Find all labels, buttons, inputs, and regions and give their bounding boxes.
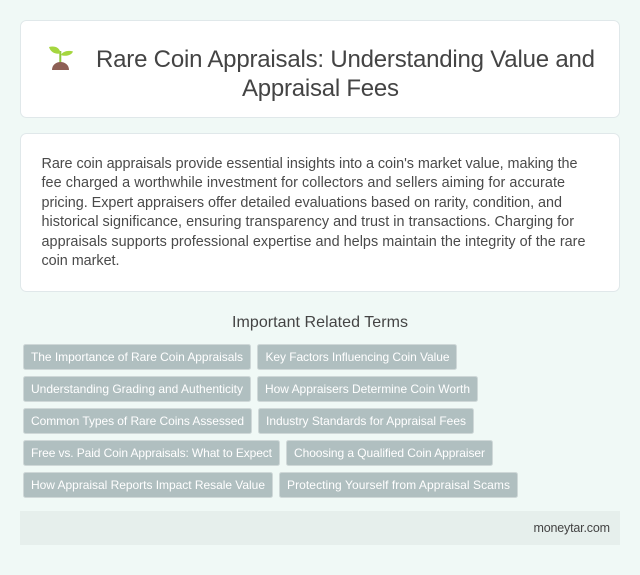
chip bbox=[258, 344, 456, 370]
footer: moneytar.com bbox=[534, 521, 610, 535]
text block: summary: Rare coin appraisals provide essential insights into a coin's market value, making the bbox=[42, 156, 578, 172]
footer bbox=[20, 511, 620, 545]
chip bbox=[24, 472, 272, 498]
chip bbox=[258, 376, 478, 402]
text block: summary: historical significance, ensuring transparency and trust in transactions. Charging for bbox=[42, 214, 574, 230]
chip: The Importance of Rare Coin Appraisals bbox=[31, 350, 243, 364]
text block: summary bbox=[42, 156, 586, 269]
title: Rare Coin Appraisals: Understanding Value and bbox=[96, 46, 595, 73]
chip bbox=[24, 408, 252, 434]
text block: summary: fee charged a worthwhile investment for collectors and sellers aiming for accurate bbox=[42, 175, 565, 191]
panel: header bbox=[20, 20, 620, 118]
chip bbox=[24, 344, 250, 370]
title bbox=[96, 46, 595, 102]
panel: related terms chips bbox=[24, 344, 518, 498]
title: Appraisal Fees bbox=[242, 75, 399, 102]
panel: summary paragraph bbox=[20, 134, 620, 292]
chip bbox=[24, 376, 250, 402]
text block: summary: pricing. Expert appraisers offer detailed evaluations based on rarity, condition, and bbox=[42, 195, 562, 211]
chip: Industry Standards for Appraisal Fees bbox=[266, 414, 466, 428]
chip: How Appraisal Reports Impact Resale Value bbox=[31, 478, 265, 492]
text block: summary: coin market. bbox=[42, 253, 120, 269]
chip bbox=[280, 472, 518, 498]
chip: Understanding Grading and Authenticity bbox=[31, 382, 243, 396]
chip bbox=[258, 408, 474, 434]
chip: Choosing a Qualified Coin Appraiser bbox=[294, 446, 485, 460]
chip bbox=[286, 440, 492, 466]
text block: summary: appraisals supports professional expertise and helps maintain the integrity of the rare bbox=[42, 234, 586, 250]
chip: Free vs. Paid Coin Appraisals: What to Expect bbox=[31, 446, 273, 460]
chip: Key Factors Influencing Coin Value bbox=[266, 350, 450, 364]
chip: How Appraisers Determine Coin Worth bbox=[265, 382, 470, 396]
chip bbox=[24, 440, 280, 466]
chip: Common Types of Rare Coins Assessed bbox=[31, 414, 244, 428]
chip: Protecting Yourself from Appraisal Scams bbox=[287, 478, 510, 492]
heading: related terms: Important Related Terms bbox=[232, 314, 408, 331]
icon: seedling bbox=[49, 46, 73, 70]
